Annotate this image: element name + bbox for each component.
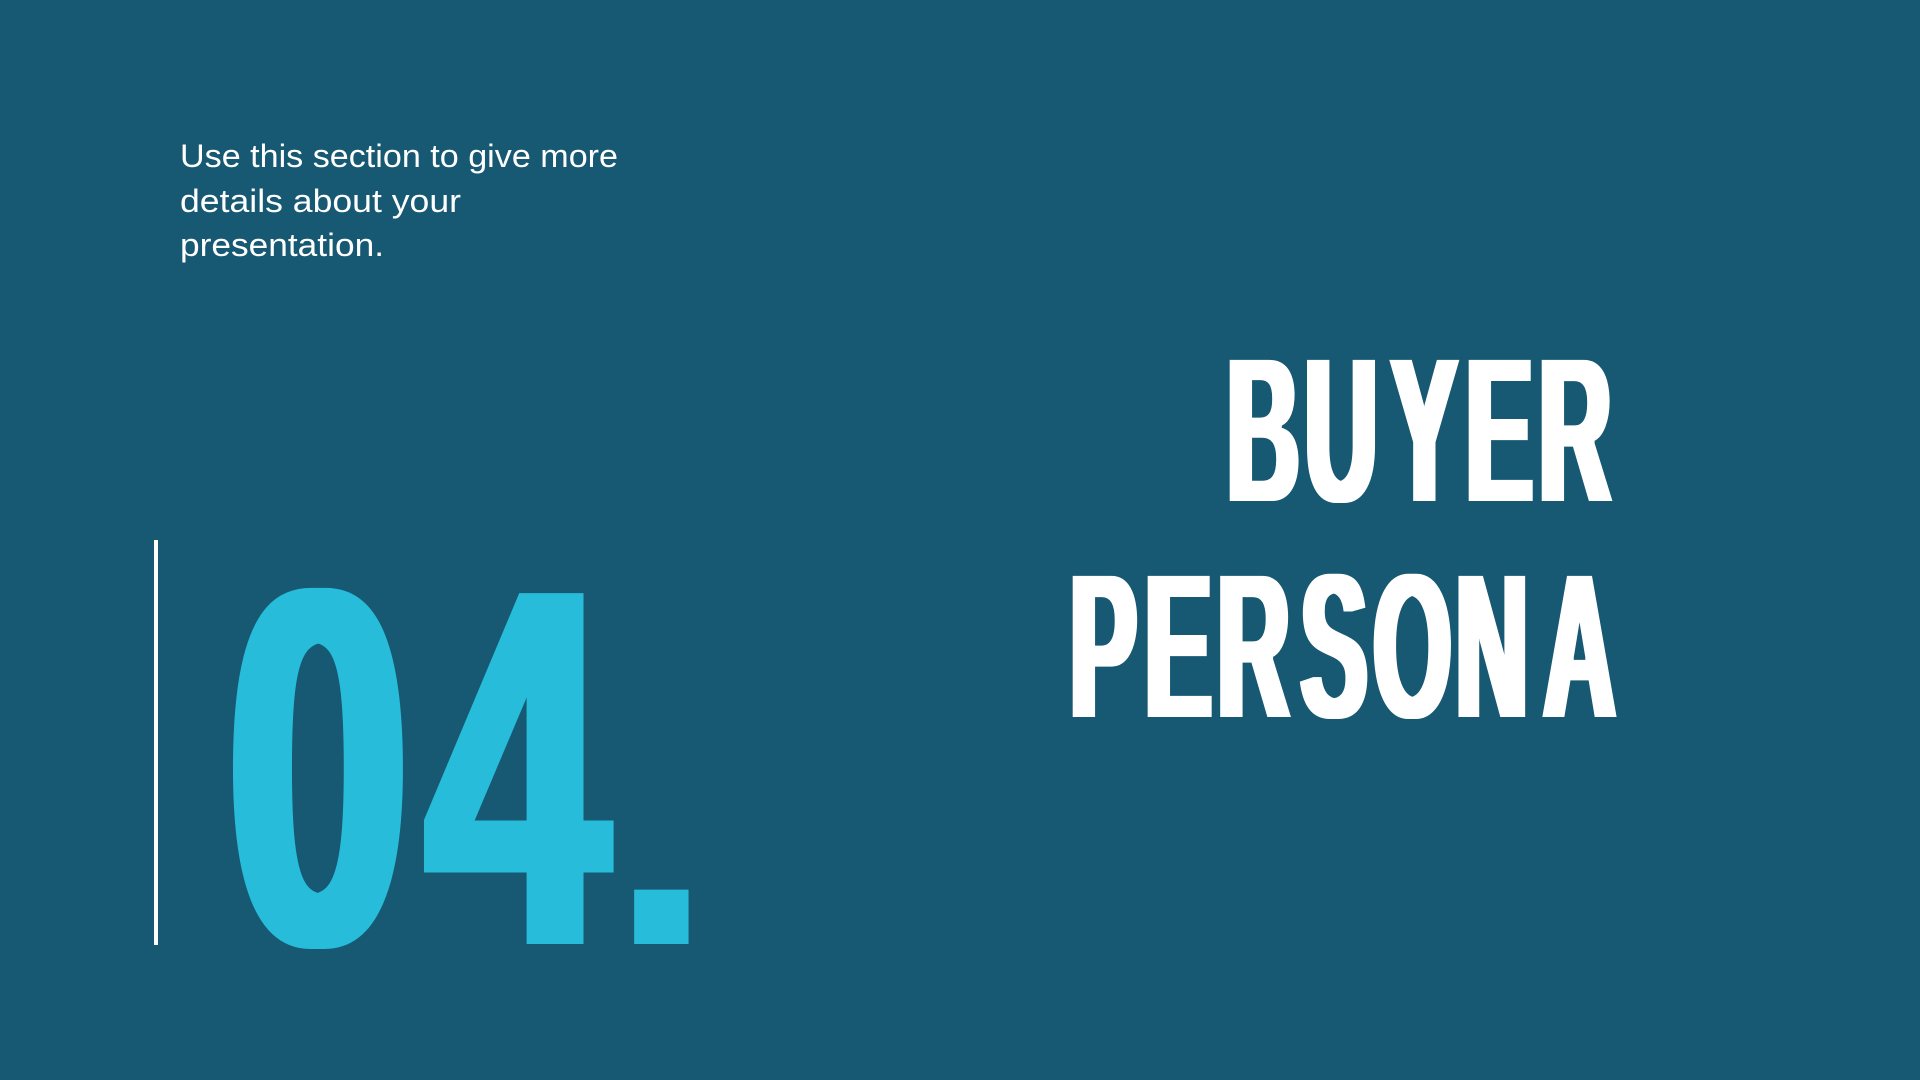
vertical accent line bbox=[154, 540, 158, 945]
title: BUYER bbox=[1227, 313, 1611, 547]
description text block: Use this section to give more bbox=[180, 138, 618, 174]
description text block bbox=[180, 138, 618, 263]
section number bbox=[227, 482, 715, 1052]
section number: . bbox=[608, 613, 715, 1022]
title: PERSONA bbox=[1070, 529, 1616, 763]
title bbox=[1070, 313, 1616, 763]
description text block: details about your bbox=[180, 183, 461, 219]
section number: 4 bbox=[426, 482, 610, 1052]
description text block: presentation. bbox=[180, 227, 384, 263]
section number: 0 bbox=[227, 482, 409, 1052]
